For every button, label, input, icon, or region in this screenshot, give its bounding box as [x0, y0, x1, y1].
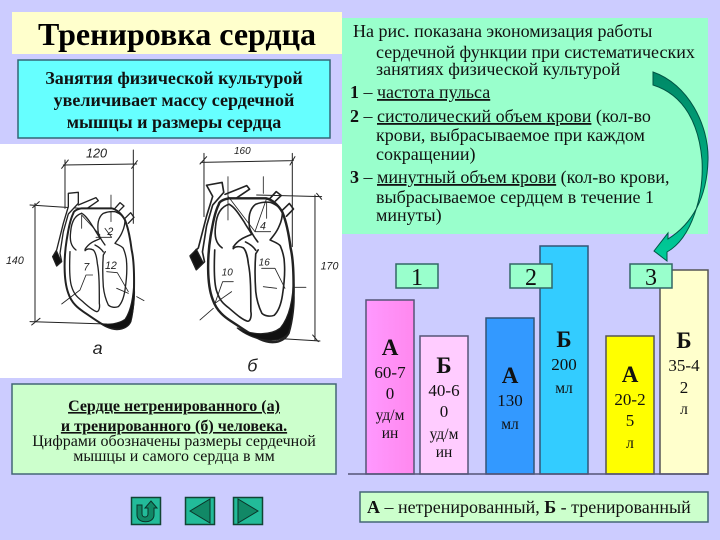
- heart a: untrained heart: 120: [86, 146, 107, 160]
- caption panel: heart legend: Сердце нетренированного (а): [68, 398, 280, 415]
- callout: heart mass increase: мышцы и размеры сердца: [67, 112, 281, 132]
- label: 2: 2: [525, 265, 537, 291]
- bar: pulse A: 60-7: [374, 363, 406, 382]
- bar: pulse A: А: [382, 335, 399, 360]
- panel: explanation text: минуты): [376, 205, 442, 226]
- panel: heart diagrams: [0, 144, 342, 378]
- bar: minute volume B: 35-4: [668, 356, 700, 375]
- bar: pulse B: уд/м: [430, 426, 459, 443]
- bar: stroke volume B: 200: [551, 355, 577, 374]
- panel: explanation text: занятиях физической культурой: [376, 59, 621, 79]
- bar: minute volume A: 5: [626, 411, 634, 430]
- panel: explanation text: [342, 18, 708, 234]
- bar: minute volume A: 20-2: [614, 390, 646, 409]
- bar: pulse A: 0: [386, 384, 394, 403]
- heart a: untrained heart: 140: [6, 255, 24, 267]
- caption panel: heart legend: и тренированного (б) человека.: [61, 418, 287, 435]
- heart b: trained heart: 170: [321, 260, 338, 272]
- panel: explanation text: сокращении): [376, 144, 475, 165]
- arrow: from text to chart 3: [653, 72, 708, 261]
- callout: heart mass increase: увеличивает массу сердечной: [54, 90, 294, 110]
- bar: minute volume A: [606, 336, 654, 474]
- heart a: untrained heart: а: [93, 338, 103, 358]
- heart a: untrained heart: 7: [83, 262, 90, 274]
- callout: heart mass increase: [18, 60, 330, 138]
- bar: stroke volume A: [486, 318, 534, 474]
- bar: minute volume B: 2: [680, 378, 688, 397]
- bar: pulse B: Б: [436, 353, 452, 378]
- bar: stroke volume A: 130: [497, 391, 523, 410]
- heart a: untrained heart: 2: [106, 226, 113, 238]
- heart b: trained heart: [190, 146, 338, 376]
- heart b: trained heart: 10: [222, 267, 233, 278]
- bar: minute volume A: А: [622, 362, 639, 387]
- bar: stroke volume A: мл: [501, 416, 519, 433]
- bar: minute volume A: л: [626, 435, 634, 452]
- panel: explanation text: На рис. показана экономизация работы: [353, 21, 652, 41]
- heart b: trained heart: 160: [234, 146, 251, 157]
- panel: explanation text: сердечной функции при систематических: [376, 42, 695, 62]
- heart b: trained heart: б: [247, 356, 258, 376]
- bar: pulse B: [420, 336, 468, 474]
- icon: next button: [234, 498, 262, 524]
- legend: А – нетренированный, Б - тренированный: [367, 497, 691, 517]
- bar: minute volume B: [660, 270, 708, 474]
- bar: stroke volume B: Б: [556, 327, 572, 352]
- legend: [360, 492, 708, 522]
- label: 2: [510, 264, 552, 291]
- caption panel: heart legend: Цифрами обозначены размеры сердечной: [32, 433, 316, 450]
- bar: stroke volume B: [540, 246, 588, 474]
- label: 3: [630, 264, 672, 291]
- icon: return button: [132, 498, 160, 524]
- bar: pulse B: 0: [440, 402, 448, 421]
- heart b: trained heart: 4: [260, 220, 266, 232]
- panel: explanation text: крови, выбрасываемое при каждом: [376, 125, 645, 145]
- bar: pulse A: ин: [382, 425, 398, 442]
- heart b: trained heart: 16: [259, 257, 270, 268]
- callout: heart mass increase: Занятия физической культурой: [45, 68, 303, 88]
- heart a: untrained heart: 12: [105, 260, 117, 272]
- heart a: untrained heart: [6, 146, 144, 358]
- panel: explanation text: 1 – частота пульса: [350, 82, 490, 102]
- title: Тренировка сердца: [38, 16, 316, 52]
- panel: explanation text: 3 – минутный объем крови (кол-во крови,: [350, 167, 669, 188]
- caption panel: heart legend: мышцы и самого сердца в мм: [73, 448, 275, 465]
- bar: stroke volume B: мл: [555, 380, 573, 397]
- label: 1: 1: [411, 265, 423, 291]
- panel: explanation text: 2 – систолический объем крови (кол-во: [350, 106, 651, 127]
- bar: minute volume B: л: [680, 401, 688, 418]
- panel: explanation text: выбрасываемое сердцем в течение 1: [376, 187, 654, 207]
- chart: bars: [348, 246, 708, 474]
- bar: stroke volume A: А: [502, 363, 519, 388]
- label: 3: 3: [645, 265, 657, 291]
- bar: pulse B: 40-6: [428, 381, 460, 400]
- bar: pulse B: ин: [436, 444, 452, 461]
- bar: pulse A: [366, 300, 414, 474]
- bar: minute volume B: Б: [676, 328, 692, 353]
- label: 1: [396, 264, 438, 291]
- bar: pulse A: уд/м: [376, 407, 405, 424]
- caption panel: heart legend: [12, 384, 336, 474]
- icon: previous button: [186, 498, 214, 524]
